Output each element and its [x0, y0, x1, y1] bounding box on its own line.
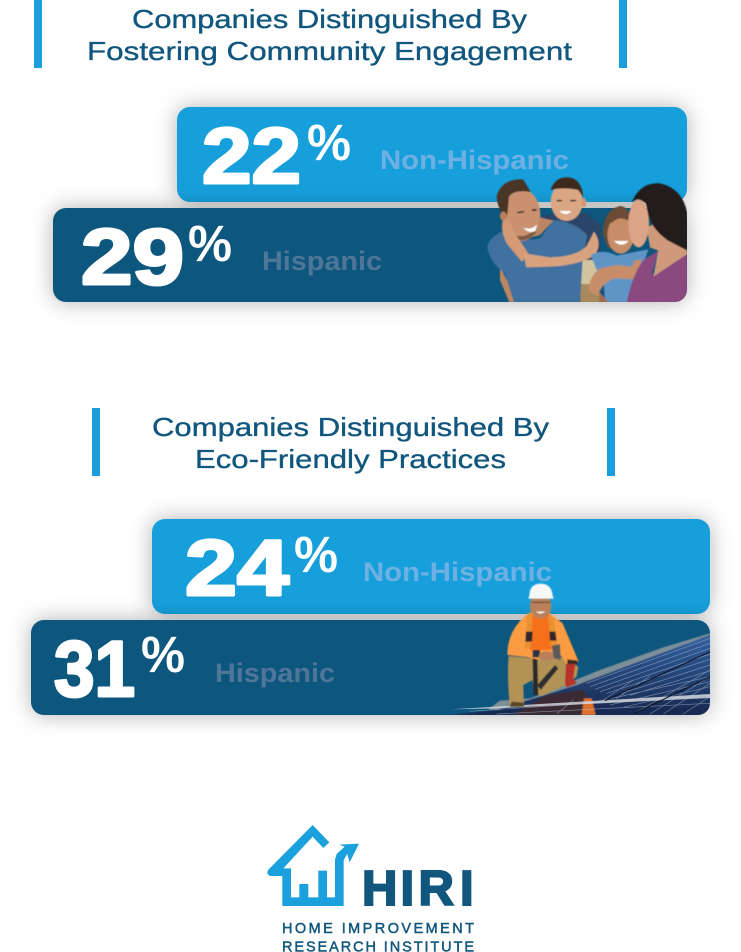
girl hair [603, 206, 631, 248]
bar: non-Hispanic 24%: % [294, 526, 338, 583]
bar: Hispanic 29%: 29 [81, 212, 184, 301]
heading: eco-friendly practices: Eco-Friendly Practices [195, 444, 506, 474]
panel: community engagement [34, 0, 687, 302]
boy head [551, 182, 583, 221]
heading: eco-friendly practices: Companies Distinguished By [152, 412, 549, 442]
boy shirt and legs [540, 213, 601, 302]
boy arms [502, 219, 529, 262]
photo: smiling family [487, 177, 687, 302]
bar: Hispanic 31%: Hispanic [215, 658, 335, 688]
wordmark: HIRI [362, 862, 474, 916]
bar: Hispanic 29% [53, 208, 687, 302]
panel grid [470, 638, 710, 714]
bar: non-Hispanic 24%: 24 [185, 523, 289, 612]
woman hair [632, 183, 687, 251]
face [530, 593, 551, 619]
left leg [508, 656, 533, 707]
photo: worker on solar panels [450, 584, 710, 715]
bar: non-Hispanic 24%: Non-Hispanic [363, 557, 552, 587]
bar: Hispanic 29%: % [188, 215, 232, 272]
bar: non-Hispanic 22%: % [307, 114, 351, 171]
roof edge [488, 633, 710, 710]
girl face [607, 216, 634, 254]
right thigh [530, 657, 578, 696]
hard hat [528, 584, 554, 599]
heading: community engagement [34, 0, 627, 68]
man neck [531, 216, 554, 238]
bar: Hispanic 31% [31, 620, 710, 715]
man shirt [487, 220, 587, 302]
woman blouse [627, 251, 687, 302]
bar: non-Hispanic 22% [177, 107, 687, 202]
orange shirt [507, 612, 579, 665]
icon: house with rising arrow [267, 825, 359, 906]
heading: community engagement: Companies Distinguished By [132, 4, 527, 34]
panel reflection [513, 690, 596, 715]
logo: HIRI [267, 825, 474, 952]
bar: Hispanic 31%: % [141, 626, 185, 683]
bar: non-Hispanic 22%: Non-Hispanic [380, 145, 569, 175]
strap [533, 658, 538, 695]
safety harness [525, 613, 533, 648]
bar: non-Hispanic 24% [152, 519, 710, 614]
woman face [628, 199, 649, 247]
solar array [452, 635, 710, 715]
bar: Hispanic 31%: 31 [54, 624, 135, 713]
man head [503, 189, 540, 241]
heading: eco-friendly practices [92, 408, 615, 476]
hands, cuff and drill [533, 650, 540, 657]
bar: Hispanic 29%: Hispanic [262, 246, 382, 276]
tagline [282, 921, 474, 952]
panel: eco-friendly practices [31, 408, 710, 715]
heading: community engagement: Fostering Community Engagement [87, 36, 573, 66]
bar: non-Hispanic 22%: 22 [202, 111, 301, 200]
tagline: HOME IMPROVEMENT [282, 921, 474, 937]
girl dress [591, 249, 648, 302]
